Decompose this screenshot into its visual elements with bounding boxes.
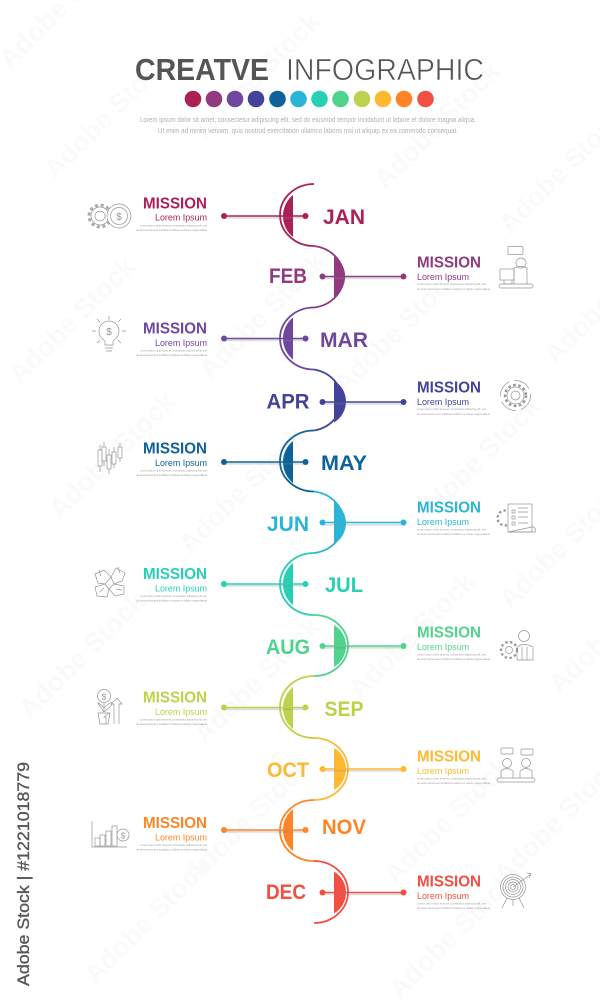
panel: APR: do eiusmod tempor incididunt ut labore et dolore magna aliqua	[417, 412, 490, 416]
panel: SEP: SEP	[324, 698, 364, 721]
panel: SEP: do eiusmod tempor incididunt ut labore et dolore magna aliqua	[136, 722, 207, 726]
watermark pattern: Adobe Stock	[193, 246, 332, 384]
panel: JUL: Lorem ipsum dolor sit amet, consectetur adipiscing elit, sed	[140, 594, 207, 598]
intro paragraph	[140, 115, 476, 135]
panel: AUG	[266, 615, 490, 676]
icon: two people talking	[497, 748, 535, 782]
panel: APR: MISSION	[417, 380, 481, 396]
icon: growing plant with coin: $	[102, 692, 107, 702]
watermark pattern: Adobe Stock	[188, 6, 327, 144]
icon: light bulb: $	[106, 327, 112, 338]
panel: DEC	[266, 861, 490, 923]
panel: OCT	[267, 738, 490, 800]
panel: FEB: Lorem ipsum dolor sit amet, consectetur adipiscing elit, sed	[417, 282, 486, 286]
panel: NOV: Lorem Ipsum	[155, 832, 207, 844]
panel: APR: APR	[266, 390, 310, 414]
intro paragraph: Lorem ipsum dolor sit amet, consectetur adipiscing elit, sed do eiusmod tempor incididunt ut labore et dolore magna aliqua.	[140, 115, 476, 124]
panel: DEC: Lorem ipsum dolor sit amet, consectetur adipiscing elit, sed	[417, 902, 486, 906]
panel: JAN	[136, 184, 365, 246]
panel: AUG: Lorem Ipsum	[417, 642, 469, 653]
panel: APR: Lorem ipsum dolor sit amet, consectetur adipiscing elit, sed	[417, 407, 486, 411]
watermark pattern: Adobe Stock	[368, 56, 507, 194]
watermark pattern: Adobe Stock	[408, 391, 547, 529]
panel: MAR: do eiusmod tempor incididunt ut labore et dolore magna aliqua	[136, 353, 207, 357]
panel: NOV	[136, 800, 366, 861]
stock credit: Adobe Stock | #1221018779	[14, 762, 33, 986]
panel: JAN: MISSION	[143, 196, 207, 212]
panel: OCT: MISSION	[417, 748, 481, 766]
panel: JUL: MISSION	[143, 566, 207, 583]
icon: gear with circular arrows	[500, 380, 530, 410]
panel: AUG: AUG	[266, 636, 310, 659]
panel: JUN: do eiusmod tempor incididunt ut labore et dolore magna aliqua	[417, 532, 490, 536]
watermark pattern: Adobe Stock	[328, 261, 467, 399]
icon: checklist with gear	[498, 504, 535, 532]
panel: JUN: MISSION	[417, 500, 481, 516]
watermark pattern: Adobe Stock	[188, 611, 327, 749]
watermark pattern: Adobe Stock	[43, 386, 182, 524]
icon: target with arrow	[500, 873, 531, 908]
watermark pattern: Adobe Stock	[13, 586, 152, 724]
panel: FEB: FEB	[269, 265, 307, 288]
panel: FEB	[269, 246, 490, 308]
panel: MAY: MISSION	[143, 440, 207, 458]
panel: MAR: Lorem ipsum dolor sit amet, consectetur adipiscing elit, sed	[140, 348, 207, 352]
panel: JAN: Lorem ipsum dolor sit amet, consectetur adipiscing elit, sed	[140, 224, 207, 228]
panel: DEC: do eiusmod tempor incididunt ut labore et dolore magna aliqua	[417, 906, 490, 910]
panel: JUN	[267, 492, 490, 553]
panel: JUL: do eiusmod tempor incididunt ut labore et dolore magna aliqua	[136, 598, 207, 602]
icon: joined hands	[95, 567, 125, 597]
title: INFOGRAPHIC	[286, 53, 484, 87]
panel: MAY	[136, 430, 367, 492]
panel: JAN: JAN	[323, 206, 365, 229]
panel: NOV: do eiusmod tempor incididunt ut labore et dolore magna aliqua	[136, 848, 207, 852]
watermark pattern: Adobe Stock	[3, 251, 142, 389]
icon: gear and coin	[89, 204, 131, 228]
panel: MAY: Lorem ipsum dolor sit amet, consectetur adipiscing elit, sed	[140, 468, 207, 472]
panel: SEP: Lorem ipsum dolor sit amet, consectetur adipiscing elit, sed	[140, 718, 207, 722]
panel: SEP: MISSION	[143, 690, 207, 706]
panel: MAY: MAY	[321, 452, 367, 475]
watermark pattern: Adobe Stock	[78, 851, 217, 989]
panel: AUG: MISSION	[417, 624, 481, 642]
icon: candlestick chart	[98, 442, 122, 474]
panel: MAR	[136, 308, 368, 370]
panel: SEP: Lorem Ipsum	[155, 707, 207, 718]
icon: growing plant with coin	[98, 690, 122, 724]
panel: NOV: MISSION	[143, 815, 207, 832]
icon: bar chart with coin: $	[121, 832, 126, 840]
panel: DEC: Lorem Ipsum	[417, 891, 469, 902]
panel: NOV: Lorem ipsum dolor sit amet, consectetur adipiscing elit, sed	[140, 843, 207, 847]
intro paragraph: Ut enim ad minim veniam, quis nostrud exercitation ullamco laboris nisi ut aliquip ex ea commodo consequat.	[158, 126, 458, 135]
panel: OCT: Lorem Ipsum	[417, 766, 469, 777]
panel: JAN: Lorem Ipsum	[155, 212, 207, 224]
panel: JUN: JUN	[267, 513, 309, 536]
icon: bar chart with coin	[92, 821, 129, 847]
panel: APR	[266, 370, 490, 430]
icon: light bulb	[92, 316, 126, 351]
title: CREATVE	[135, 53, 269, 87]
icon: gear and coin: $	[116, 212, 122, 223]
panel: DEC: MISSION	[417, 874, 481, 890]
panel: AUG: Lorem ipsum dolor sit amet, consectetur adipiscing elit, sed	[417, 652, 486, 656]
panel: JAN: do eiusmod tempor incididunt ut labore et dolore magna aliqua	[136, 228, 207, 232]
panel: JUN: Lorem ipsum dolor sit amet, consectetur adipiscing elit, sed	[417, 528, 486, 532]
panel: JUN: Lorem Ipsum	[417, 517, 469, 528]
panel: FEB: Lorem Ipsum	[417, 272, 469, 283]
panel: OCT: OCT	[267, 759, 309, 782]
panel: AUG: do eiusmod tempor incididunt ut labore et dolore magna aliqua	[417, 657, 490, 661]
panel: OCT: Lorem ipsum dolor sit amet, consectetur adipiscing elit, sed	[417, 776, 486, 780]
watermark pattern: Adobe Stock	[38, 46, 177, 184]
watermark pattern: Adobe Stock	[178, 751, 317, 889]
icon: support person at desk	[499, 246, 533, 288]
panel: DEC: DEC	[266, 881, 306, 904]
watermark pattern: Adobe Stock	[343, 566, 482, 704]
panel: APR: Lorem Ipsum	[417, 397, 469, 408]
panel: MAR: Lorem Ipsum	[155, 338, 207, 349]
panel: OCT: do eiusmod tempor incididunt ut labore et dolore magna aliqua	[417, 781, 490, 785]
panel: MAR: MISSION	[143, 320, 207, 338]
title	[135, 53, 484, 87]
panel: FEB: do eiusmod tempor incididunt ut labore et dolore magna aliqua	[417, 287, 490, 291]
watermark pattern: Adobe Stock	[378, 751, 517, 889]
panel: SEP	[136, 676, 364, 738]
panel: JUL	[136, 553, 363, 615]
panel: MAY: do eiusmod tempor incididunt ut labore et dolore magna aliqua	[136, 473, 207, 477]
panel: FEB: MISSION	[417, 254, 481, 272]
watermark pattern: Adobe Stock	[173, 421, 312, 559]
panel: JUL: Lorem Ipsum	[155, 584, 207, 594]
panel: NOV: NOV	[322, 816, 366, 839]
panel: MAR: MAR	[320, 329, 368, 352]
panel: MAY: Lorem Ipsum	[155, 458, 207, 469]
panel: JUL: JUL	[325, 574, 363, 597]
colour dots row	[185, 91, 434, 107]
icon: gear and person	[501, 630, 533, 660]
